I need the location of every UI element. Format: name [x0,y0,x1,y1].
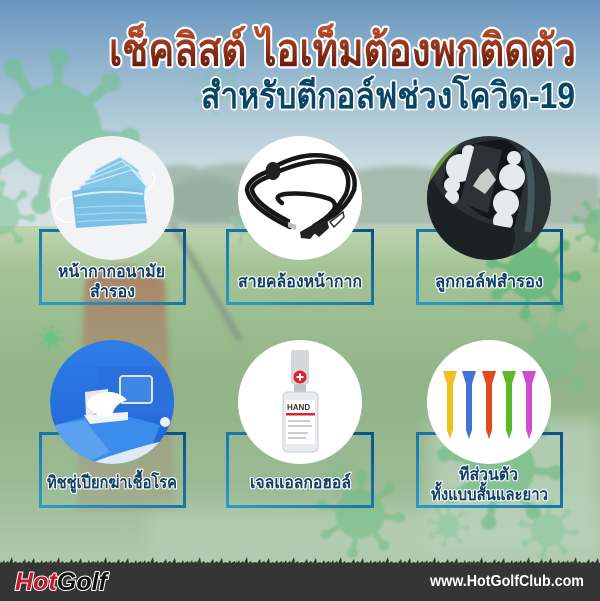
label: ทีส่วนตัว [459,464,518,484]
label box [418,434,562,506]
logo: HotGolf: HotGolf [15,568,110,596]
label [431,464,548,504]
label box [228,230,372,304]
label: หน้ากากอนามัย [58,262,165,281]
label box [40,230,184,304]
label: ทั้งแบบสั้นและยาว [431,481,548,504]
label: สำรอง [90,282,135,301]
icon: golf tees [427,340,551,464]
icon: lanyard [238,136,362,260]
icon: sanitizer bottle: HAND [287,403,310,412]
label: เจลแอลกอฮอล์ [250,472,351,492]
title [109,23,576,116]
panel: mask lanyard [228,136,372,304]
label box [228,434,372,506]
label box [418,230,562,304]
footer bar [0,556,600,601]
label [58,262,165,301]
icon: golf bag with balls [420,136,551,262]
label: ทิชชู่เปียกฆ่าเชื้อโรค [47,469,177,494]
icon: sanitizer bottle [238,340,362,464]
label: ลูกกอล์ฟสำรอง [435,271,543,293]
label box [40,434,184,506]
icon: wet wipes pack [50,340,176,470]
panel: alcohol gel [228,340,372,506]
website url: www.HotGolfClub.com [429,573,584,590]
panel: spare golf balls [418,136,562,304]
icon: surgical masks [50,136,174,260]
label: สายคล้องหน้ากาก [238,272,362,291]
panel: personal tees [418,340,562,506]
panel: disinfectant wipes [40,340,184,506]
panel: surgical mask [40,136,184,304]
